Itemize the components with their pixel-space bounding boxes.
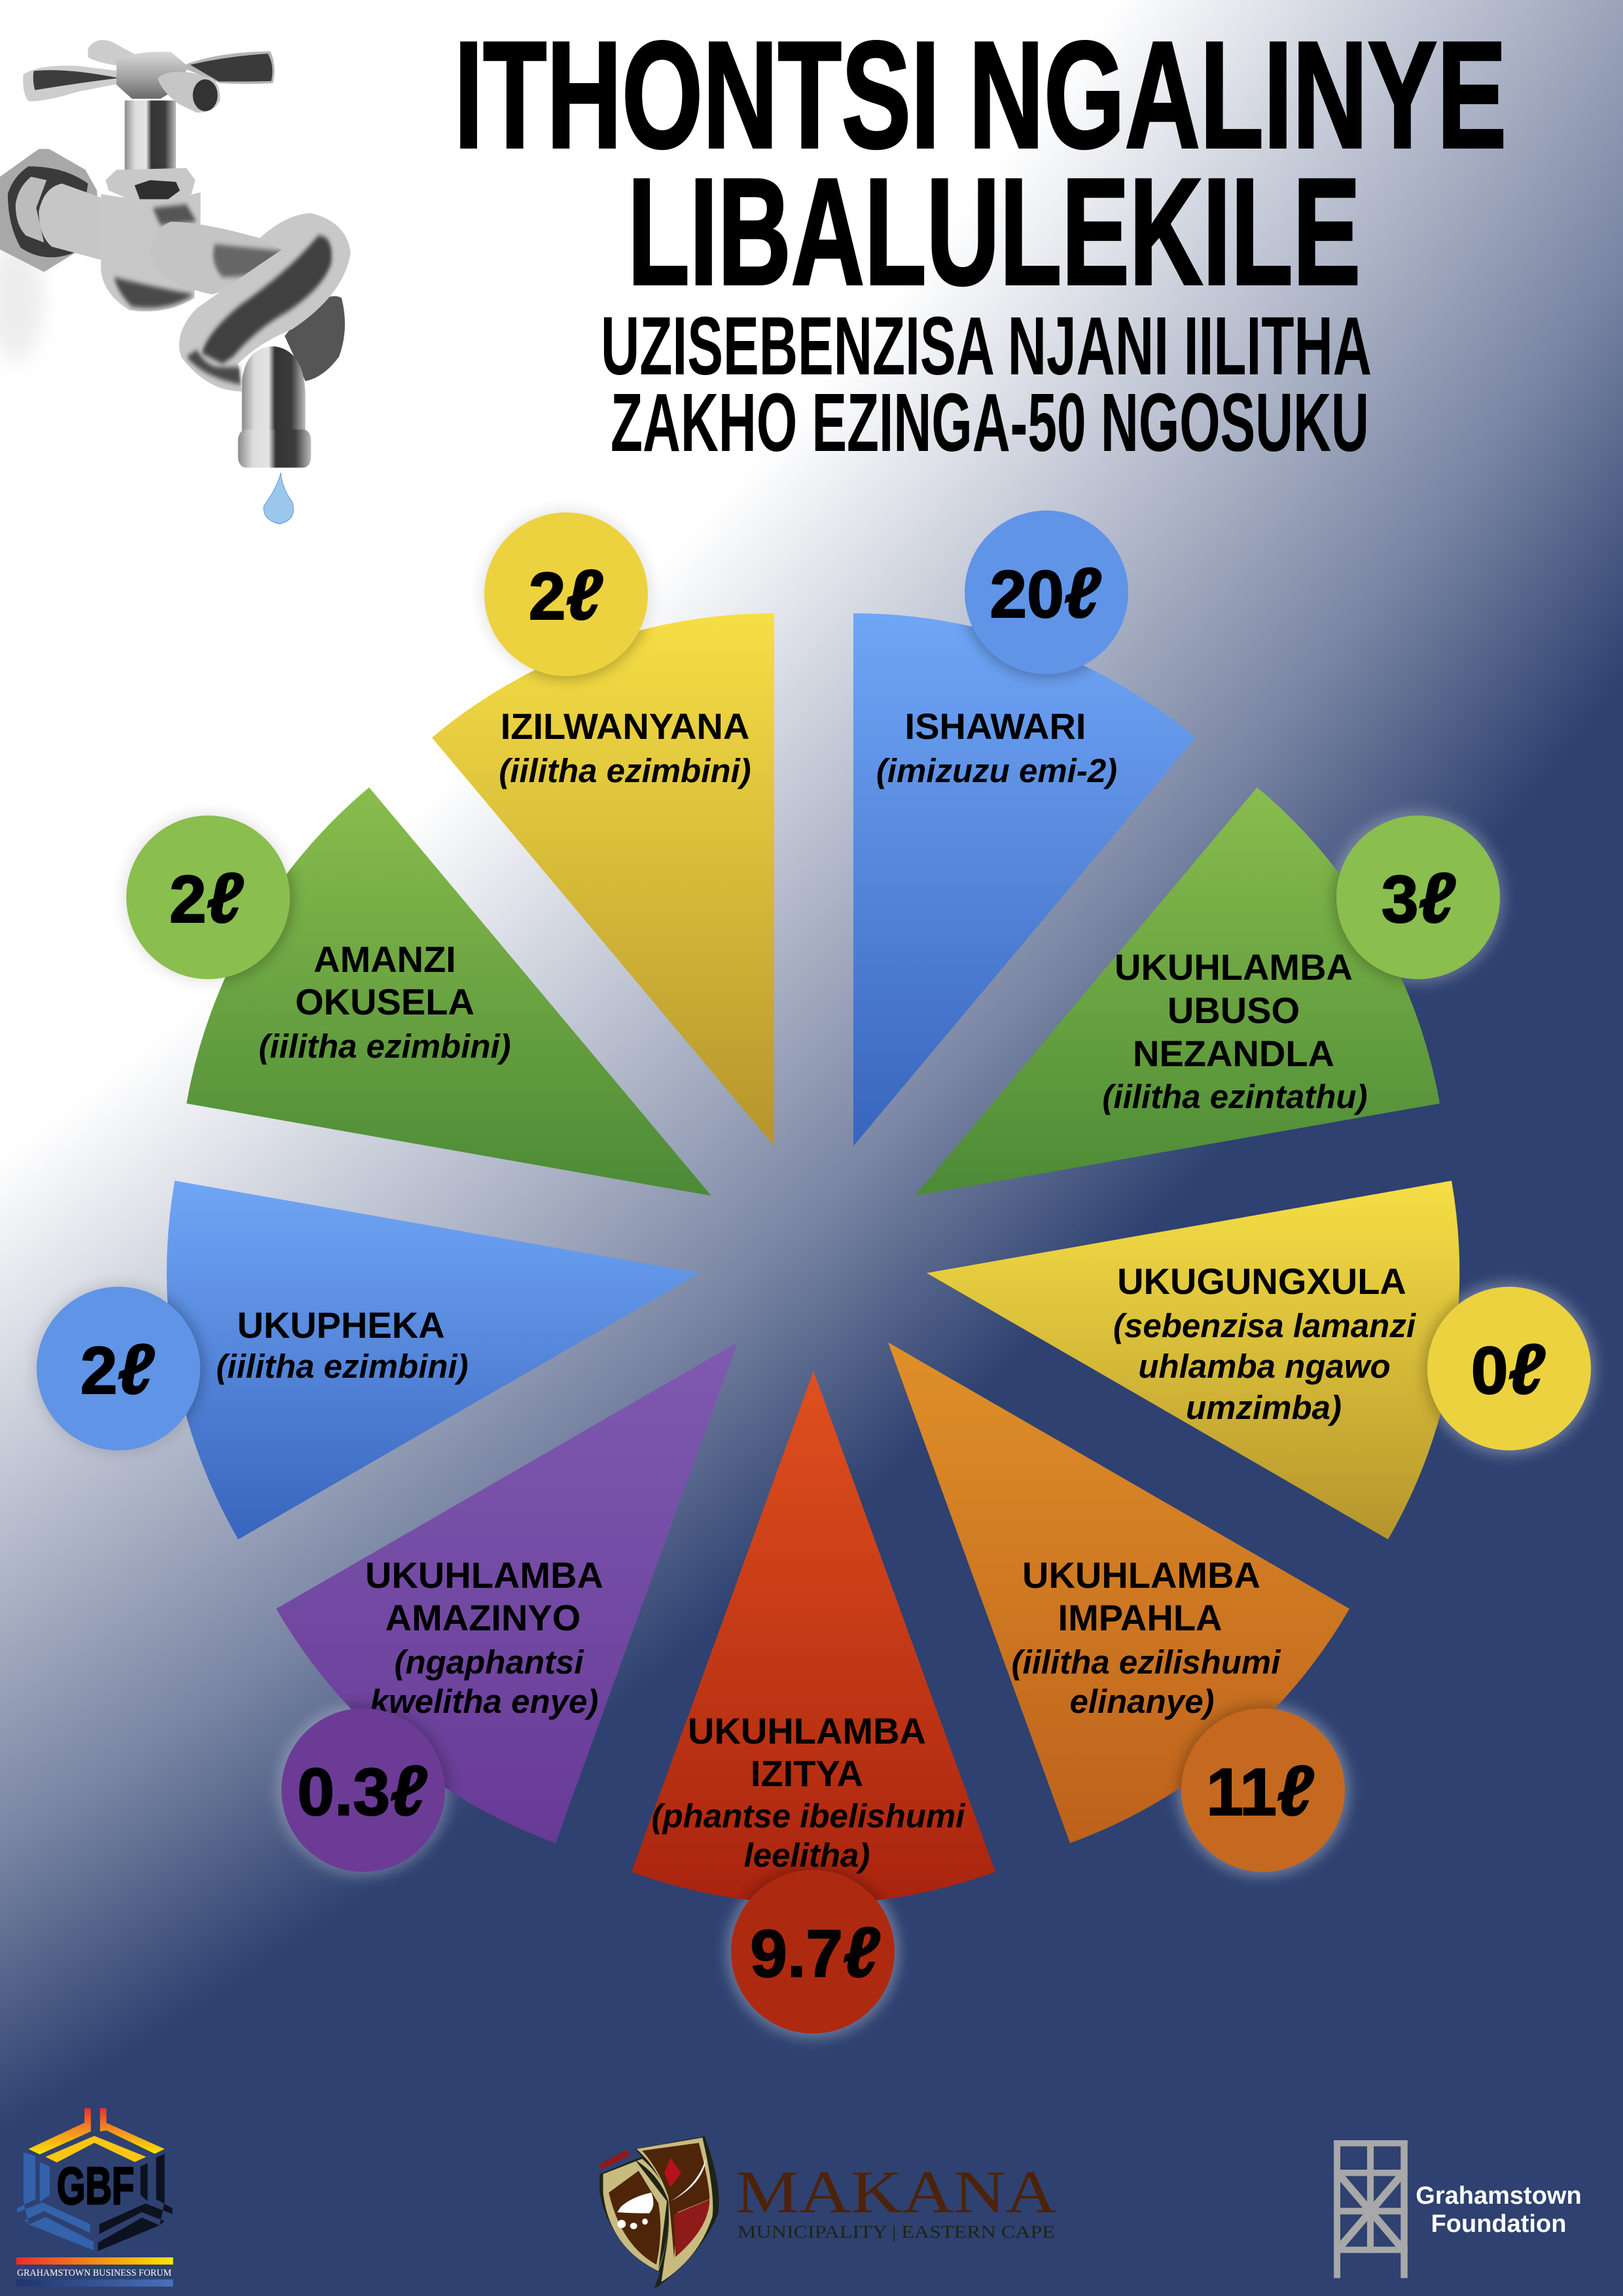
value badge: 0.3ℓ [297,1751,427,1830]
label: (ngaphantsi [394,1643,584,1681]
label [499,706,751,789]
label: UBUSO [1168,990,1300,1031]
label: UKUHLAMBA [688,1710,926,1751]
label: IZILWANYANA [501,706,749,747]
value badge: 2ℓ [529,555,603,634]
label [876,706,1117,789]
sector [167,1181,700,1539]
label [1113,1261,1417,1426]
label: uhlamba ngawo [1138,1348,1391,1385]
GBF wordmark: GBF [57,2157,134,2215]
value badge [965,511,1128,674]
organisation name [1416,2182,1582,2238]
value badge: 3ℓ [1382,858,1455,937]
label: UKUHLAMBA [365,1554,603,1596]
sector [927,1181,1459,1539]
label [216,1304,469,1385]
organisation name: Foundation [1431,2210,1566,2238]
label: leelitha) [744,1837,870,1874]
label: umzimba) [1186,1389,1342,1426]
icon: knotted tap with water drop [0,40,351,524]
label: elinanye) [1069,1683,1215,1720]
label: NEZANDLA [1133,1033,1334,1074]
icon: shield [599,2136,719,2289]
title [454,10,1507,469]
value badge [1336,816,1500,979]
value badge: 20ℓ [990,553,1101,632]
logo: Makana Municipality [599,2136,1057,2289]
label: IZITYA [751,1753,863,1794]
panel: teeth 0.3 litres [276,1342,738,1876]
sector [888,1342,1349,1843]
label: (phantse ibelishumi [652,1797,966,1835]
panel: dishes 9.7 litres [632,1371,995,2038]
tagline: MUNICIPALITY | EASTERN CAPE [738,2222,1055,2242]
value badge: 2ℓ [80,1329,154,1408]
panel: drinking water 2 litres [123,787,711,1196]
panel: shower 20 litres [853,507,1196,1146]
sector [432,613,774,1146]
panel: wash face and hands 3 litres [915,787,1505,1196]
organisation name: Grahamstown [1416,2182,1582,2210]
value badge: 0ℓ [1471,1329,1545,1408]
panel: cooking 2 litres [33,1181,700,1539]
sector [276,1342,738,1843]
sector [915,787,1440,1196]
value badge [37,1287,200,1450]
label [1102,946,1368,1115]
panel: flushing 0 litres [927,1181,1596,1539]
label: UKUHLAMBA [1022,1554,1260,1596]
label: OKUSELA [295,981,474,1022]
logo: Grahamstown Business Forum [16,2108,173,2287]
knot [179,213,351,391]
label: UKUGUNGXULA [1117,1261,1406,1302]
value badge [1427,1287,1591,1450]
panel: animals 2 litres [432,509,774,1146]
panel: laundry 11 litres [888,1342,1349,1876]
logo: Grahamstown Foundation [1334,2140,1582,2278]
label: (iilitha ezintathu) [1102,1078,1368,1115]
label: (iilitha ezimbini) [259,1028,511,1065]
label: UKUHLAMBA [1115,946,1353,988]
value badge [281,1708,445,1872]
label [259,939,511,1065]
label [652,1710,966,1874]
label: IMPAHLA [1058,1597,1222,1638]
label: (iilitha ezimbini) [216,1348,469,1385]
value badge: 9.7ℓ [750,1912,880,1992]
forum name: GRAHAMSTOWN BUSINESS FORUM [17,2268,171,2278]
label: ISHAWARI [905,706,1086,747]
value badge [1181,1708,1345,1872]
label: kwelitha enye) [370,1683,598,1720]
label: (iilitha ezilishumi [1012,1643,1281,1681]
label: (sebenzisa lamanzi [1113,1307,1417,1344]
label: (imizuzu emi-2) [876,752,1117,789]
label: (iilitha ezimbini) [499,752,751,789]
label: UKUPHEKA [237,1304,445,1346]
label [1012,1554,1281,1720]
label [365,1554,603,1720]
value badge: 11ℓ [1206,1751,1314,1830]
label: AMAZINYO [385,1597,580,1638]
sector [187,787,711,1196]
sector [632,1371,995,1904]
wordmark: MAKANA [736,2159,1057,2225]
value badge [484,512,648,676]
icon: water drop [264,473,294,524]
label: AMANZI [313,939,456,980]
value badge [731,1870,895,2034]
icon: tower frame [1334,2140,1408,2278]
value badge [126,816,290,979]
sector [853,613,1196,1146]
value badge: 2ℓ [169,858,243,937]
